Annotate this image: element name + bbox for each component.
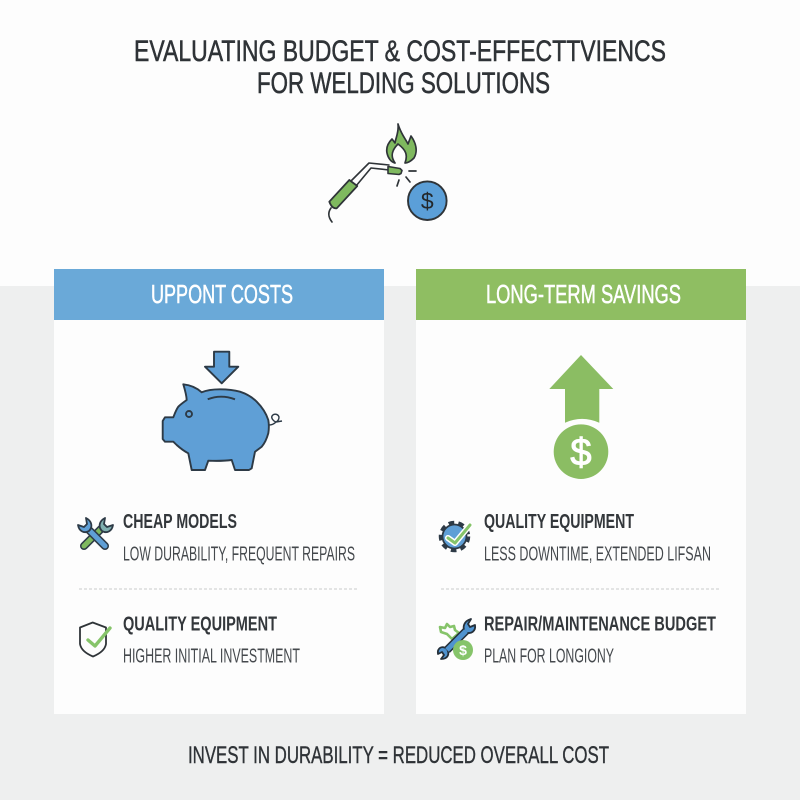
- panel header: long-term savings: LONG-TERM SAVINGS: [486, 281, 681, 309]
- item: repair and maintenance budget: PLAN FOR LONGIONY: [484, 646, 614, 668]
- item: quality equipment: QUALITY EQUIPMENT: [123, 612, 277, 636]
- icon: dollar coin: $: [421, 188, 434, 214]
- icon: shield with check: [80, 622, 110, 656]
- icon: flame: [387, 124, 416, 163]
- title: FOR WELDING SOLUTIONS: [257, 67, 550, 100]
- item: cheap models: CHEAP MODELS: [123, 510, 237, 533]
- icon: wrench with gear and dollar: [438, 619, 475, 660]
- item: cheap models: LOW DURABILITY, FREQUENT REPAIRS: [123, 544, 355, 566]
- icon: up arrow with dollar coin: $: [570, 432, 592, 474]
- panel header: upfront costs: [54, 269, 384, 320]
- icon: gear with check: [441, 523, 470, 550]
- panel header: upfront costs: UPPONT COSTS: [151, 281, 293, 309]
- item: repair and maintenance budget: [438, 612, 716, 668]
- panel: long-term savings: [416, 269, 746, 714]
- icon: piggy bank with down arrow: [163, 352, 282, 470]
- item: quality equipment: QUALITY EQUIPMENT: [484, 510, 634, 533]
- item: quality equipment: HIGHER INITIAL INVESTMENT: [123, 646, 300, 668]
- item: quality equipment: [80, 612, 300, 668]
- title: [134, 35, 666, 100]
- icon: crossed wrenches: [78, 518, 113, 546]
- icon: wrench with gear and dollar: $: [459, 642, 467, 658]
- icon: welding torch with flame and dollar coin: [329, 124, 447, 222]
- icon: torch: [329, 163, 416, 222]
- item: quality equipment: [441, 510, 711, 566]
- item: cheap models: [78, 510, 355, 566]
- panel: upfront costs: [54, 269, 384, 714]
- footer takeaway: INVEST IN DURABILITY = REDUCED OVERALL COST: [188, 742, 609, 769]
- item: repair and maintenance budget: REPAIR/MAINTENANCE BUDGET: [484, 612, 716, 636]
- panel header: long-term savings: [416, 269, 746, 320]
- icon: up arrow with dollar coin: [549, 355, 613, 479]
